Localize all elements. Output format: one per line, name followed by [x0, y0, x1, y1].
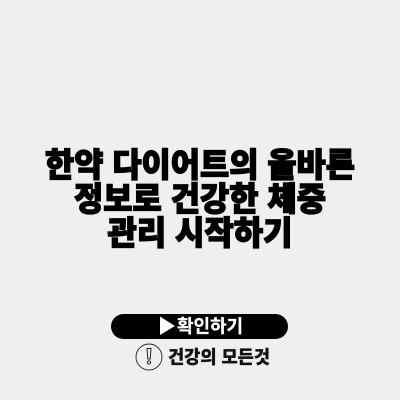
title: 정보로 건강한 체중: [74, 172, 326, 220]
icon: play triangle: [160, 316, 175, 335]
source label: 건강의 모든것: 건강의 모든것: [168, 344, 270, 370]
icon: exclamation circle: [136, 344, 162, 370]
button: 확인하기: 확인하기: [177, 312, 243, 338]
title: 한약 다이어트의 올바른: [45, 138, 355, 186]
title: [45, 138, 355, 254]
title: 관리 시작하기: [108, 206, 292, 254]
button: 확인하기: [111, 312, 288, 339]
